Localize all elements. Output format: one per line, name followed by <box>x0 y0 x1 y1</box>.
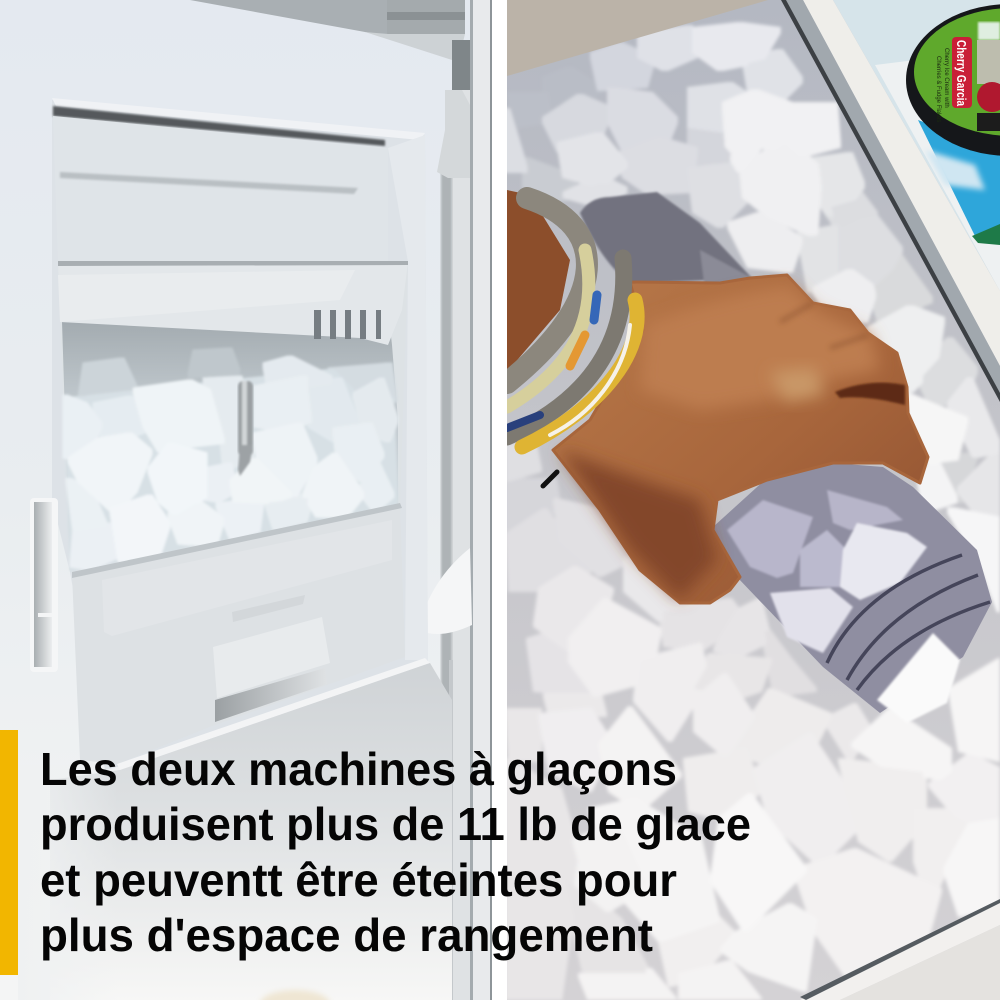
headline: produisent plus de 11 lb de glace <box>40 798 751 850</box>
steel top edge <box>507 0 768 76</box>
dispenser recess <box>52 98 428 770</box>
bottle cap <box>580 192 752 290</box>
headline: Les deux machines à glaçons <box>40 743 677 795</box>
metal ice arm <box>238 381 253 476</box>
hand and arm <box>507 190 928 603</box>
bin glass edge and background <box>781 0 1000 402</box>
bracelets <box>507 198 637 486</box>
bin base with handle <box>72 503 430 770</box>
accent bar <box>0 730 18 975</box>
ice cream tub: Cherries & Fudge Flakes <box>935 56 941 122</box>
divider <box>492 0 507 1000</box>
ice cubes bottom <box>507 445 1000 1000</box>
ice cream tub: Cherry Garcia <box>954 40 969 107</box>
lower door <box>18 663 452 1000</box>
panel: refrigerator ice maker <box>0 0 492 1000</box>
ice cubes in bin <box>65 350 396 568</box>
headline: et peuventt être éteintes pour <box>40 854 677 906</box>
ice bin <box>58 261 408 484</box>
headline: plus d'espace de rangement <box>40 909 653 961</box>
ice cubes top <box>507 25 1000 610</box>
bin bottom edge <box>800 899 1000 1000</box>
headline <box>40 743 751 961</box>
bottle with ice <box>713 463 992 723</box>
side slot <box>30 498 58 672</box>
panel: hand filling bottle with ice <box>507 0 1000 1000</box>
door frame <box>190 0 492 1000</box>
ice cream tub: Cherry Ice Cream with <box>943 48 949 108</box>
ice cream tub <box>906 4 1000 245</box>
